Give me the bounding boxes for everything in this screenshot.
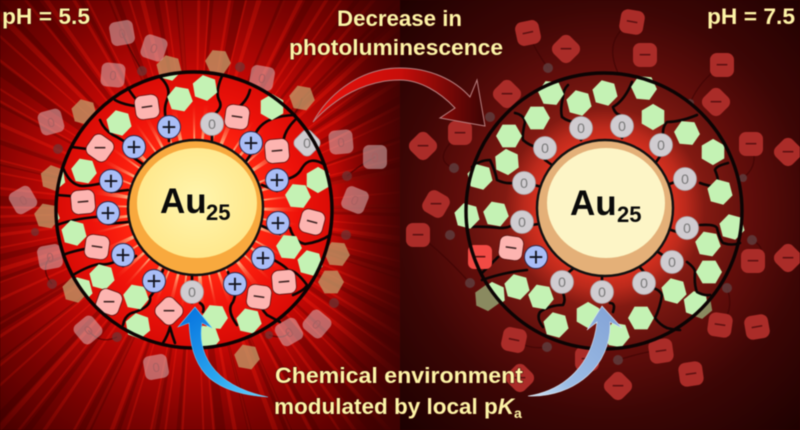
label: chemical environment modulated by local pKa: modulated by local pK: [274, 394, 514, 419]
faded ligands outside left shell: 0: [349, 192, 361, 209]
right remaining charged ligands: [468, 233, 548, 272]
right neutral ligands: 0: [520, 175, 528, 191]
faded ligands outside right shell: −: [639, 42, 651, 67]
faded ligands outside right shell: −: [624, 8, 641, 35]
label: decrease in photoluminescence: photoluminescence: [289, 35, 503, 60]
label: pH 5.5: pH = 5.5: [2, 4, 90, 29]
left negative ligands: −: [94, 135, 106, 160]
left negative ligands: [70, 92, 327, 329]
left negative ligands: −: [251, 283, 267, 310]
label: decrease in photoluminescence: [289, 6, 503, 60]
faded ligands outside right shell: −: [505, 326, 523, 353]
faded ligands outside right shell: −: [519, 19, 537, 46]
left neutral ligands: 0: [303, 135, 311, 151]
faded ligands outside left shell: [7, 19, 387, 381]
left gold core: [128, 140, 263, 275]
label: decrease in photoluminescence: Decrease in: [337, 6, 462, 31]
right neutral ligands: 0: [618, 118, 626, 134]
faded ligands outside right shell: −: [454, 120, 466, 145]
left positive ligands: +: [243, 128, 259, 158]
left nanoparticle at pH 5.5: [54, 70, 334, 350]
faded ligands outside left shell: 0: [371, 150, 379, 165]
left panel background: pH 5.5 red rays: [0, 0, 415, 430]
faded ligands outside left shell: 0: [337, 135, 345, 150]
left positive ligands: +: [103, 166, 119, 196]
faded ligands outside right shell: −: [612, 373, 624, 398]
left positive ligands: +: [270, 208, 286, 238]
faded ligands outside left shell: 0: [257, 70, 267, 87]
right remaining charged ligands: −: [474, 244, 486, 269]
faded ligands outside left shell: 0: [282, 324, 296, 341]
faded ligands outside right shell: −: [430, 191, 442, 216]
right gold core: [537, 140, 673, 276]
left neutral ligands: 0: [208, 116, 216, 132]
left core label: Au: [160, 182, 207, 221]
left core label: 25: [206, 200, 230, 225]
left positive ligands: +: [100, 198, 116, 228]
faded ligands outside left shell: 0: [309, 316, 324, 332]
faded ligands outside right shell: −: [560, 36, 572, 61]
left negative ligands: −: [269, 137, 284, 164]
right green hexagons: [451, 76, 748, 339]
faded ligands outside right shell: [404, 7, 800, 404]
left negative ligands: −: [139, 93, 155, 120]
left positive ligands: +: [146, 266, 162, 296]
left negative ligands: −: [103, 289, 115, 314]
right neutral ligands: 0: [598, 284, 606, 300]
right panel background: pH 7.5 dark red: [400, 0, 800, 430]
label: chemical environment modulated by local pKa: Chemical environment: [275, 363, 524, 388]
right neutral ligands: 0: [558, 274, 566, 290]
faded ligands outside right shell: −: [747, 248, 759, 273]
faded ligands outside left shell: 0: [16, 192, 30, 209]
arrow: pale blue, points to right neutral ligand: [528, 306, 622, 396]
left negative ligands: −: [75, 188, 90, 215]
right neutral ligands: 0: [640, 275, 648, 291]
right shell interior: [466, 73, 742, 349]
left positive ligands: +: [269, 165, 285, 195]
left negative ligands: −: [229, 103, 245, 130]
faded ligands outside right shell: −: [581, 346, 593, 371]
right core label: 25: [617, 202, 641, 227]
left positive ligands: [96, 112, 290, 299]
faded ligands outside right shell: −: [412, 222, 424, 247]
left negative ligands: −: [276, 268, 291, 295]
faded ligands outside right shell: −: [501, 81, 513, 106]
faded ligands outside left shell: 0: [151, 359, 161, 376]
left neutral ligands: [180, 112, 323, 304]
faded ligands outside right shell: −: [653, 337, 669, 364]
left green hexagons: [58, 73, 335, 341]
left shell interior: [56, 72, 332, 348]
right ligand tethers: [467, 82, 740, 330]
right neutral ligands: 0: [541, 140, 549, 156]
faded ligands outside left shell: 0: [109, 68, 117, 83]
right neutral ligands: 0: [681, 171, 689, 187]
faded ligands outside right shell: −: [745, 131, 757, 156]
faded ligands outside right shell: −: [710, 89, 722, 114]
right nanoparticle at pH 7.5: [451, 73, 748, 349]
left negative ligands: −: [303, 208, 322, 235]
right neutral ligands: 0: [668, 254, 676, 270]
faded ligands outside right shell: −: [683, 360, 699, 387]
right neutral ligands: 0: [518, 214, 526, 230]
faded ligands outside right shell: −: [417, 133, 429, 158]
left neutral ligands: 0: [188, 284, 196, 300]
faded ligands outside left shell: 0: [81, 322, 96, 338]
left positive ligands: +: [227, 269, 243, 299]
right neutral ligands: [510, 114, 698, 304]
label: chemical environment modulated by local pKa: a: [514, 405, 522, 421]
faded ligands outside left shell: 0: [45, 249, 55, 266]
right core label: Au: [570, 184, 617, 223]
faded ligands outside right shell: −: [782, 139, 794, 164]
faded ligands outside right shell: −: [782, 245, 794, 270]
left positive ligands: +: [115, 240, 131, 270]
right neutral ligands: 0: [657, 137, 665, 153]
right neutral ligands: 0: [683, 220, 691, 236]
left positive ligands: +: [161, 112, 177, 142]
faded ligands outside left shell: 0: [46, 114, 57, 131]
left negative ligands: −: [163, 298, 175, 323]
label: pH 7.5: pH = 7.5: [707, 4, 795, 29]
left shell outline: [56, 72, 332, 348]
arrow: blue, points to left neutral ligand: [178, 307, 268, 397]
label: chemical environment modulated by local pKa: [274, 363, 524, 421]
right neutral ligands: 0: [577, 120, 585, 136]
arrow: red curved, left to right particle: [313, 68, 485, 126]
right shell outline: [466, 73, 742, 349]
left positive ligands: +: [255, 243, 271, 273]
faded ligands outside left shell: 0: [148, 40, 160, 57]
faded ligands outside left shell: 0: [117, 25, 127, 42]
right remaining charged ligands: −: [503, 234, 519, 261]
right remaining charged ligands: +: [528, 242, 544, 272]
left ligand tethers: [57, 76, 330, 343]
left negative ligands: −: [89, 233, 105, 260]
faded ligands outside right shell: −: [748, 313, 765, 340]
faded ligands outside right shell: −: [712, 311, 728, 338]
left positive ligands: +: [126, 132, 142, 162]
faded ligands outside right shell: −: [716, 52, 728, 77]
faded ligands outside right shell: −: [514, 365, 526, 390]
